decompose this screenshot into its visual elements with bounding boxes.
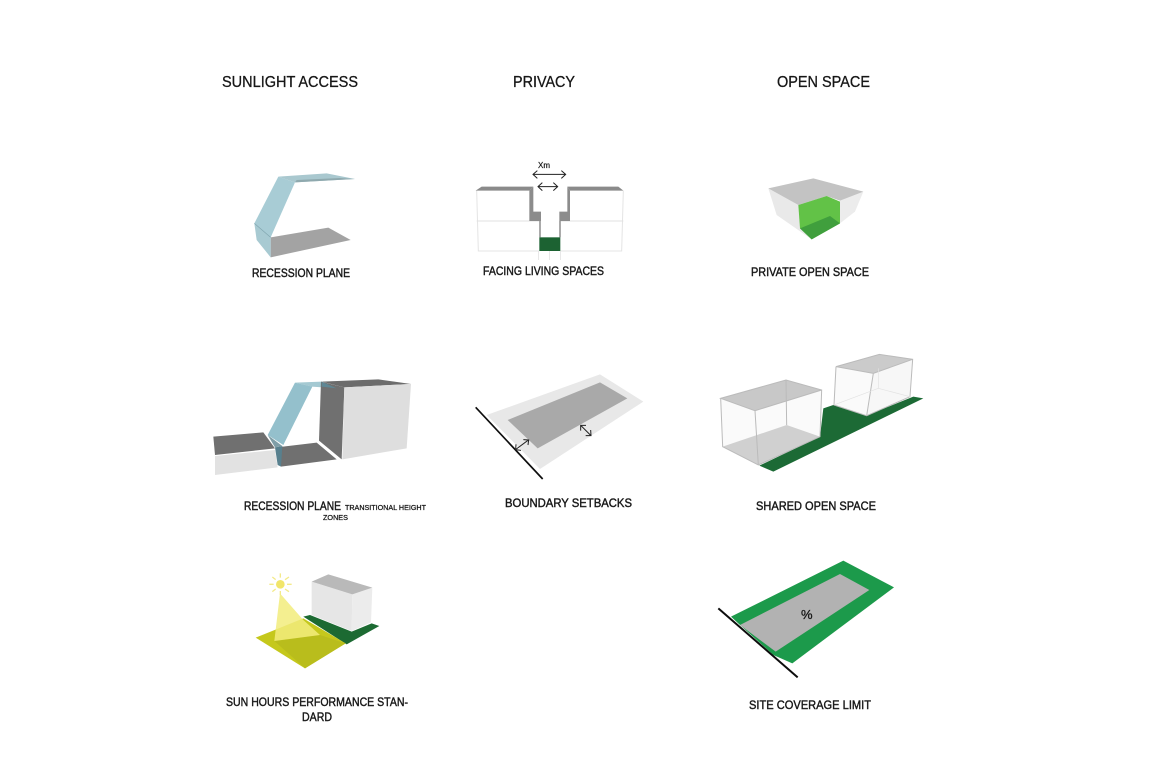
- diagram: shared open space: [721, 354, 923, 472]
- label: facing living spaces: FACING LIVING SPACES: [483, 264, 604, 278]
- dimension label: Xm: Xm: [538, 161, 550, 170]
- diagram: facing living spaces: [476, 171, 623, 260]
- diagram: sun hours performance standard: [256, 573, 379, 668]
- label: recession plane transitional height zones: TRANSITIONAL HEIGHT: [345, 505, 427, 512]
- heading: sunlight access: SUNLIGHT ACCESS: [222, 74, 358, 91]
- label: site coverage limit: SITE COVERAGE LIMIT: [749, 698, 872, 712]
- label: recession plane transitional height zones: ZONES: [323, 515, 348, 522]
- diagram: private open space: [768, 178, 863, 239]
- heading: open space: OPEN SPACE: [777, 74, 870, 91]
- diagram: site coverage limit: [718, 561, 894, 677]
- label: recession plane: RECESSION PLANE: [252, 266, 350, 280]
- label: boundary setbacks: BOUNDARY SETBACKS: [505, 496, 632, 510]
- diagram: boundary setbacks: [476, 374, 643, 479]
- heading: privacy: PRIVACY: [513, 74, 575, 91]
- label: percent: %: [801, 607, 813, 622]
- label: shared open space: SHARED OPEN SPACE: [756, 499, 876, 513]
- diagram: recession plane: [254, 173, 355, 257]
- diagram: recession plane transitional height zones: [213, 379, 411, 475]
- label: recession plane transitional height zones: [244, 499, 427, 522]
- label: recession plane transitional height zones: RECESSION PLANE: [244, 499, 341, 513]
- label: sun hours performance standard: DARD: [302, 710, 332, 724]
- label: sun hours performance standard: [226, 695, 408, 724]
- label: sun hours performance standard: SUN HOURS PERFORMANCE STAN-: [226, 695, 408, 709]
- label: private open space: PRIVATE OPEN SPACE: [751, 265, 869, 279]
